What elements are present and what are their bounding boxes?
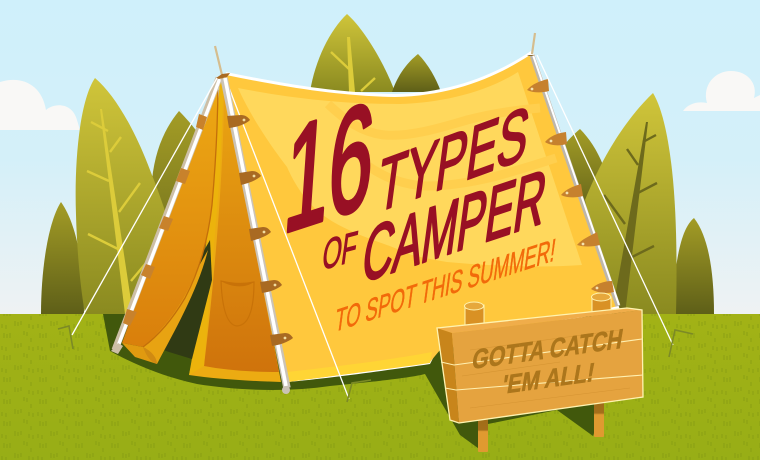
pole top sticks — [215, 33, 535, 79]
tent canopy — [224, 51, 620, 382]
tent door panel — [189, 78, 281, 382]
tree: dark leaf behind tent right — [560, 129, 603, 220]
ground — [0, 314, 760, 460]
subtitle: TO SPOT THIS SUMMER! — [333, 231, 558, 339]
tent — [111, 33, 620, 399]
pole tabs back — [527, 79, 614, 293]
shadow under tent and sign — [103, 314, 640, 451]
tree: dark leaf behind tent left — [152, 111, 215, 314]
title: 16: 16 — [280, 70, 379, 266]
title — [280, 70, 552, 300]
tree: tall leaf left — [76, 78, 190, 314]
title: OF: OF — [320, 222, 360, 280]
sky — [0, 0, 760, 316]
wooden sign — [437, 293, 643, 452]
cloud: left — [0, 80, 80, 130]
cloud: right — [683, 71, 760, 111]
sign text: em all: 'EM ALL! — [500, 357, 597, 400]
right tent pole front — [224, 78, 290, 394]
sign board — [437, 308, 643, 423]
tree: small dark leaf far right — [672, 218, 714, 314]
pole bands — [123, 114, 207, 326]
tent interior dark opening — [150, 240, 212, 359]
rope: front right — [226, 80, 349, 399]
tree: small dark leaf top centre — [392, 54, 441, 92]
guy ropes and stakes — [58, 55, 693, 402]
tree: top centre leaf — [310, 14, 395, 92]
door pocket — [221, 281, 254, 326]
title: CAMPER: CAMPER — [358, 151, 552, 300]
sign text: gotta catch: GOTTA CATCH — [470, 323, 625, 375]
canopy: folds — [328, 104, 540, 135]
sign post: left — [464, 302, 488, 452]
sign post: right — [592, 293, 611, 437]
left tent pole — [111, 78, 220, 354]
title: TYPES: TYPES — [373, 90, 534, 230]
canopy: lighter panel — [238, 72, 582, 266]
right tent pole back — [532, 55, 619, 306]
pole tabs front — [227, 115, 293, 346]
tree: dark leaf far left — [41, 202, 84, 314]
background foliage — [41, 14, 714, 314]
left door flap — [122, 78, 218, 364]
tree: tall leaf right — [585, 93, 677, 314]
